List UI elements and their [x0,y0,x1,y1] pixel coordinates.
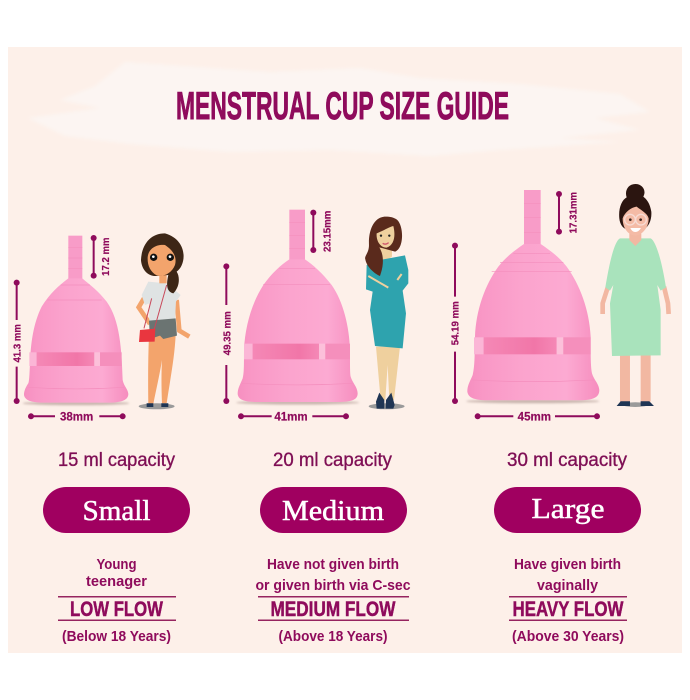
woman figure in green dress [603,184,669,407]
large cup dimensions: 45mm [518,410,551,424]
small description: Young [96,556,136,573]
medium capacity label: 20 ml capacity [273,449,392,471]
large description: Have given birth [514,556,621,573]
medium cup dimensions: 41mm [274,410,308,424]
small cup dimensions: 17.2 mm [101,237,112,276]
large description: HEAVY FLOW [512,598,624,621]
medium cup dimensions [222,210,349,424]
large description [509,556,627,645]
brush stroke behind title [28,62,650,156]
large cup dimensions: 54.19 mm [451,301,462,345]
medium description [256,556,410,645]
girl figure [139,233,189,409]
medium size pill: Medium [282,495,384,527]
small cup dimensions: 38mm [60,410,93,424]
small capacity label: 15 ml capacity [58,449,175,471]
large size pill: Large [532,493,604,525]
medium cup illustration [236,210,359,405]
small cup illustration [23,236,129,405]
small description [58,556,176,645]
large cup dimensions: 17.31mm [568,192,579,233]
small description: LOW FLOW [70,598,163,621]
medium description: (Above 18 Years) [278,628,388,645]
small description: (Below 18 Years) [62,628,171,645]
large description: vaginally [537,577,599,594]
small cup dimensions: 41.3 mm [13,324,24,362]
medium cup dimensions: 23.15mm [323,211,334,252]
medium description: MEDIUM FLOW [270,598,396,621]
large cup illustration [466,190,599,403]
large description: (Above 30 Years) [512,628,624,645]
medium description: Have not given birth [267,556,399,573]
medium size pill [260,487,407,533]
large size pill [494,487,641,533]
column: medium [222,210,410,645]
large capacity label: 30 ml capacity [507,449,627,471]
medium description: or given birth via C-sec [256,577,410,594]
large cup dimensions [451,191,600,424]
small size pill [43,487,190,533]
small description: teenager [86,573,147,590]
small cup dimensions [13,235,126,424]
small size pill: Small [82,495,150,527]
column: small [13,233,190,645]
woman figure in teal dress [365,217,408,409]
column: large [451,184,669,645]
medium cup dimensions: 49.35 mm [222,311,233,355]
